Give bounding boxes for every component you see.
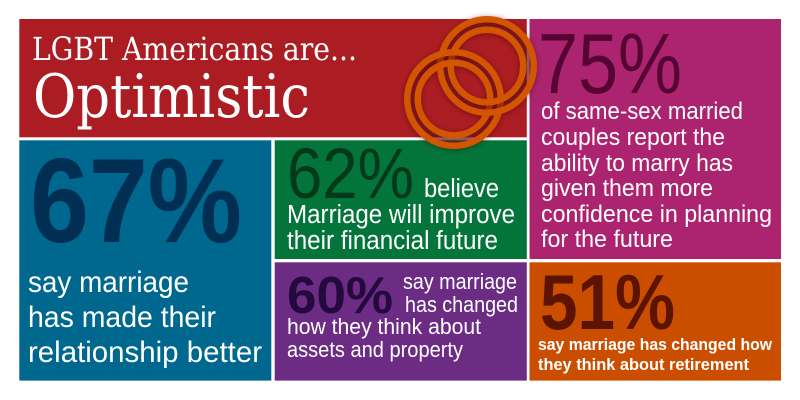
- text: relationship statement: say marriage: [28, 266, 189, 299]
- text: assets statement: has changed: [405, 292, 518, 317]
- text: relationship statement: has made their: [28, 301, 216, 334]
- panel: 51 percent: [530, 258, 781, 381]
- text: financial future statement: [287, 175, 515, 255]
- icon: interlocked wedding rings: [407, 19, 534, 146]
- panel: 60 percent: [275, 262, 527, 381]
- text: financial future statement: Marriage will improve: [287, 201, 515, 229]
- statistic: 60%: 60%: [287, 267, 393, 325]
- text: assets statement: [287, 269, 518, 362]
- statistic: 51%: 51%: [540, 258, 675, 346]
- text: confidence statement: confidence in planning: [541, 201, 772, 228]
- text: assets statement: say marriage: [403, 269, 517, 294]
- text: financial future statement: their financial future: [287, 227, 498, 255]
- text: retirement statement: [538, 335, 773, 374]
- text: assets statement: assets and property: [287, 337, 464, 362]
- text: confidence statement: for the future: [541, 226, 673, 253]
- text: retirement statement: say marriage has changed how: [538, 335, 773, 354]
- text: confidence statement: of same-sex married: [541, 98, 743, 125]
- statistic: 67%: 67%: [30, 134, 242, 268]
- panel: 62 percent: [275, 135, 527, 259]
- text: confidence statement: [541, 98, 772, 253]
- text: confidence statement: given them more: [541, 175, 713, 202]
- text: confidence statement: couples report the: [541, 124, 725, 151]
- heading: Optimistic: Optimistic: [33, 62, 310, 132]
- panel: 67 percent: [19, 134, 271, 381]
- text: relationship statement: relationship better: [28, 336, 262, 369]
- text: relationship statement: [28, 266, 262, 369]
- statistic: 62%: 62%: [287, 135, 414, 214]
- text: confidence statement: ability to marry has: [541, 150, 733, 177]
- panel: title: [19, 19, 527, 137]
- panel: 75 percent: [530, 17, 781, 259]
- text: assets statement: how they think about: [287, 314, 482, 339]
- heading: LGBT Americans are: LGBT Americans are...: [32, 32, 357, 68]
- text: financial future statement: believe: [424, 175, 499, 203]
- statistic: 75%: 75%: [538, 17, 682, 112]
- text: retirement statement: they think about retirement: [538, 355, 749, 374]
